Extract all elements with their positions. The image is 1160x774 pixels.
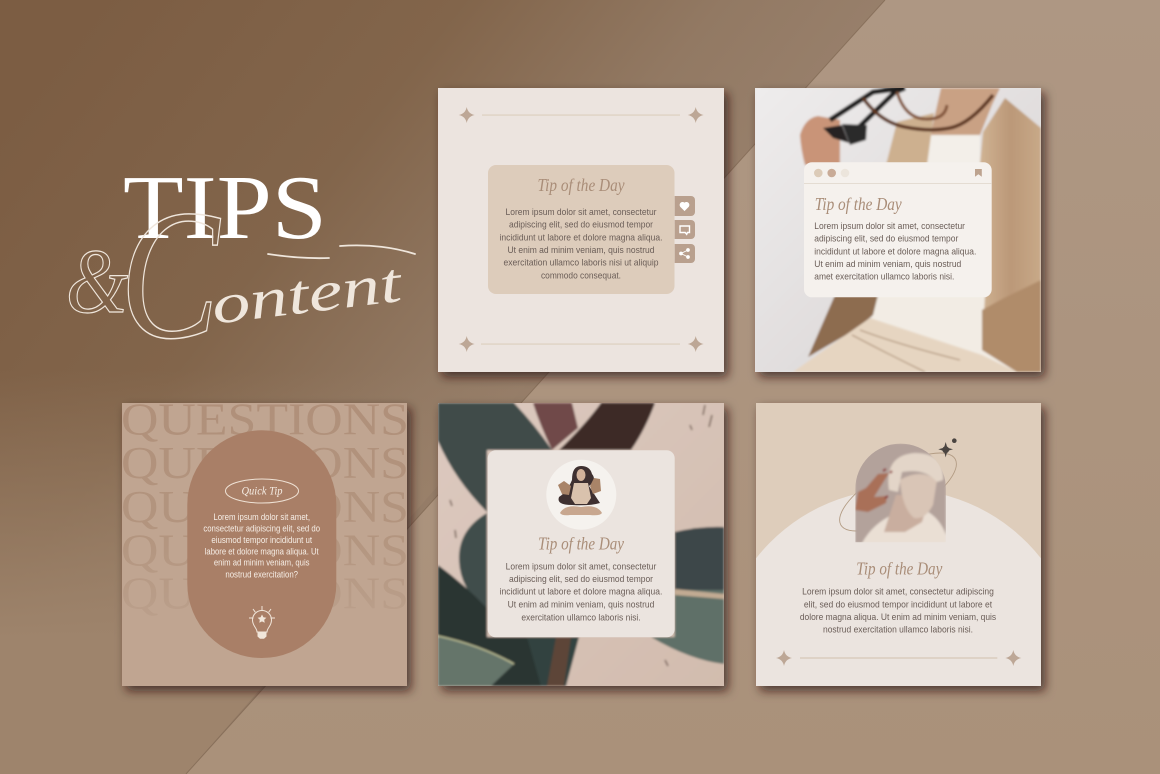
heading: Tip of the Day xyxy=(815,194,902,214)
body text: Lorem ipsum dolor sit amet, consectetur xyxy=(506,207,656,217)
heading: script ontent: ontent xyxy=(208,252,406,337)
body text: Ut enim ad minim veniam, quis nostrud xyxy=(814,259,961,269)
body text: eiusmod tempor incididunt ut xyxy=(211,535,312,545)
heading: TIPS: TIPS xyxy=(123,157,327,258)
body text: enim ad minim veniam, quis xyxy=(214,558,310,568)
light arc background xyxy=(756,489,1041,686)
body text: adipiscing elit, sed do eiusmod tempor xyxy=(814,234,958,244)
title: TIPS & Content xyxy=(66,157,415,378)
photo: woman in blazer xyxy=(755,88,1041,372)
photo: statue in arch xyxy=(855,443,946,543)
body text xyxy=(500,207,662,280)
body text: dolore magna aliqua. Ut enim ad minim veniam, quis xyxy=(800,612,996,622)
body text xyxy=(203,512,320,579)
icon: light bulb xyxy=(249,606,275,639)
repeated QUESTIONS word pattern: QUESTIONS xyxy=(121,569,409,619)
browser window box xyxy=(804,162,992,297)
body text: elit, sed do eiusmod tempor incididunt ut labore et xyxy=(804,599,993,609)
body text: nostrud exercitation? xyxy=(225,569,298,579)
body text: commodo consequat. xyxy=(541,270,621,280)
background: darker folded paper xyxy=(0,0,885,774)
orbit ring xyxy=(829,438,967,546)
heading: ampersand: & xyxy=(66,230,128,332)
badge: Quick Tip: Quick Tip xyxy=(242,484,282,498)
icon: stars xyxy=(938,438,957,457)
icon: heart xyxy=(680,202,689,210)
repeated QUESTIONS word pattern: QUESTIONS xyxy=(121,526,409,576)
badge: Quick Tip xyxy=(226,479,298,503)
panel: card 1 tip of the day xyxy=(438,88,724,372)
icon: share xyxy=(680,249,689,258)
body text: amet exercitation ullamco laboris nisi. xyxy=(814,272,954,282)
body text: Ut enim ad minim veniam, quis nostrud xyxy=(508,599,654,609)
window dots xyxy=(814,169,849,177)
body text: incididunt ut labore et dolore magna aliqua. xyxy=(500,587,662,597)
divider bottom with sparkles xyxy=(459,336,704,352)
body text: adipiscing elit, sed do eiusmod tempor xyxy=(509,220,653,230)
panel: card 3 quick tip xyxy=(121,395,409,686)
body text: Lorem ipsum dolor sit amet, consectetur adipiscing xyxy=(802,587,994,597)
body text: nostrud exercitation ullamco laboris nisi. xyxy=(823,625,973,635)
heading: Tip of the Day xyxy=(538,175,625,195)
heading: Tip of the Day xyxy=(538,534,624,554)
body text: labore et dolore magna aliqua. Ut xyxy=(205,546,319,556)
body text: exercitation ullamco laboris nisi. xyxy=(521,612,641,622)
icon: bookmark xyxy=(975,169,982,177)
divider with sparkles xyxy=(776,650,1021,666)
body text: adipiscing elit, sed do eiusmod tempor xyxy=(509,574,653,584)
body text: Lorem ipsum dolor sit amet, consectetur xyxy=(506,561,656,571)
icon: meditating woman xyxy=(546,460,616,530)
flourish: crossbars xyxy=(268,245,415,258)
heading: script capital C: C xyxy=(120,172,221,378)
heading: Tip of the Day xyxy=(856,559,942,579)
repeated QUESTIONS word pattern xyxy=(123,404,406,604)
body text xyxy=(800,587,996,635)
panel: card 5 statue xyxy=(756,403,1041,686)
body text: incididunt ut labore et dolore magna aliqua. xyxy=(814,246,976,256)
body text: consectetur adipiscing elit, sed do xyxy=(203,523,320,533)
oval panel xyxy=(187,430,336,658)
body text: Lorem ipsum dolor sit amet, xyxy=(213,512,310,522)
divider top with sparkles xyxy=(459,107,704,123)
body text xyxy=(814,221,976,282)
icon: comment xyxy=(680,226,690,234)
body text: incididunt ut labore et dolore magna aliqua. xyxy=(500,232,662,242)
panel: card 4 leaves photo xyxy=(438,403,724,686)
social buttons xyxy=(675,196,695,263)
text box xyxy=(488,165,674,294)
body text: Ut enim ad minim veniam, quis nostrud xyxy=(508,245,654,255)
panel: card 2 fashion photo xyxy=(755,88,1041,372)
repeated QUESTIONS word pattern: QUESTIONS xyxy=(121,482,409,532)
repeated QUESTIONS word pattern: QUESTIONS xyxy=(121,438,409,488)
photo: rubber plant leaves xyxy=(438,403,724,686)
body text: Lorem ipsum dolor sit amet, consectetur xyxy=(814,221,965,231)
text box xyxy=(488,450,675,637)
repeated QUESTIONS word pattern: QUESTIONS xyxy=(121,395,409,445)
body text: exercitation ullamco laboris nisi ut aliquip xyxy=(504,258,658,268)
body text xyxy=(500,561,662,622)
